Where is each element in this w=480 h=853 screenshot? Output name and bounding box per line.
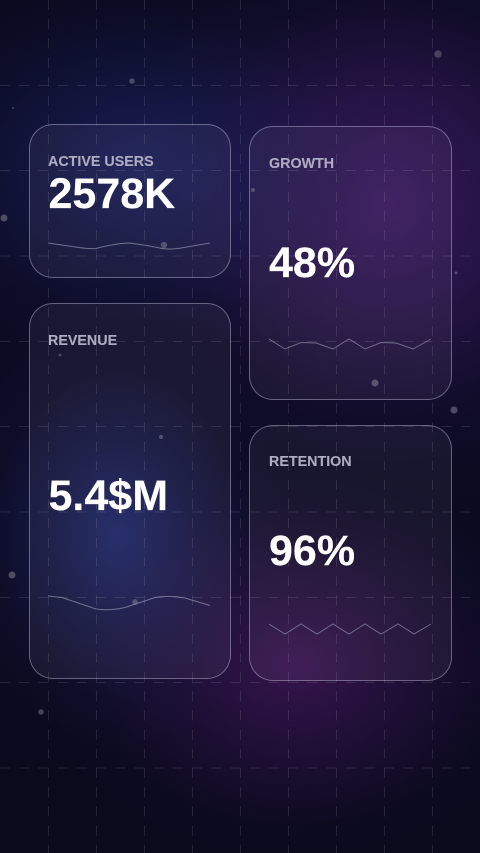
panel: growth [249,126,452,400]
heading: growth: GROWTH [269,156,334,172]
value: retention: 96% [269,526,355,574]
value: revenue: 5.4$M [48,472,168,520]
heading: active users: ACTIVE USERS [48,154,154,170]
value: growth: 48% [269,238,355,286]
heading: retention: RETENTION [269,454,352,470]
panel: active users [29,124,231,278]
heading: revenue: REVENUE [48,333,117,349]
value: active users: 2578K [48,170,175,218]
panel: revenue [29,303,231,679]
panel: retention [249,425,452,681]
